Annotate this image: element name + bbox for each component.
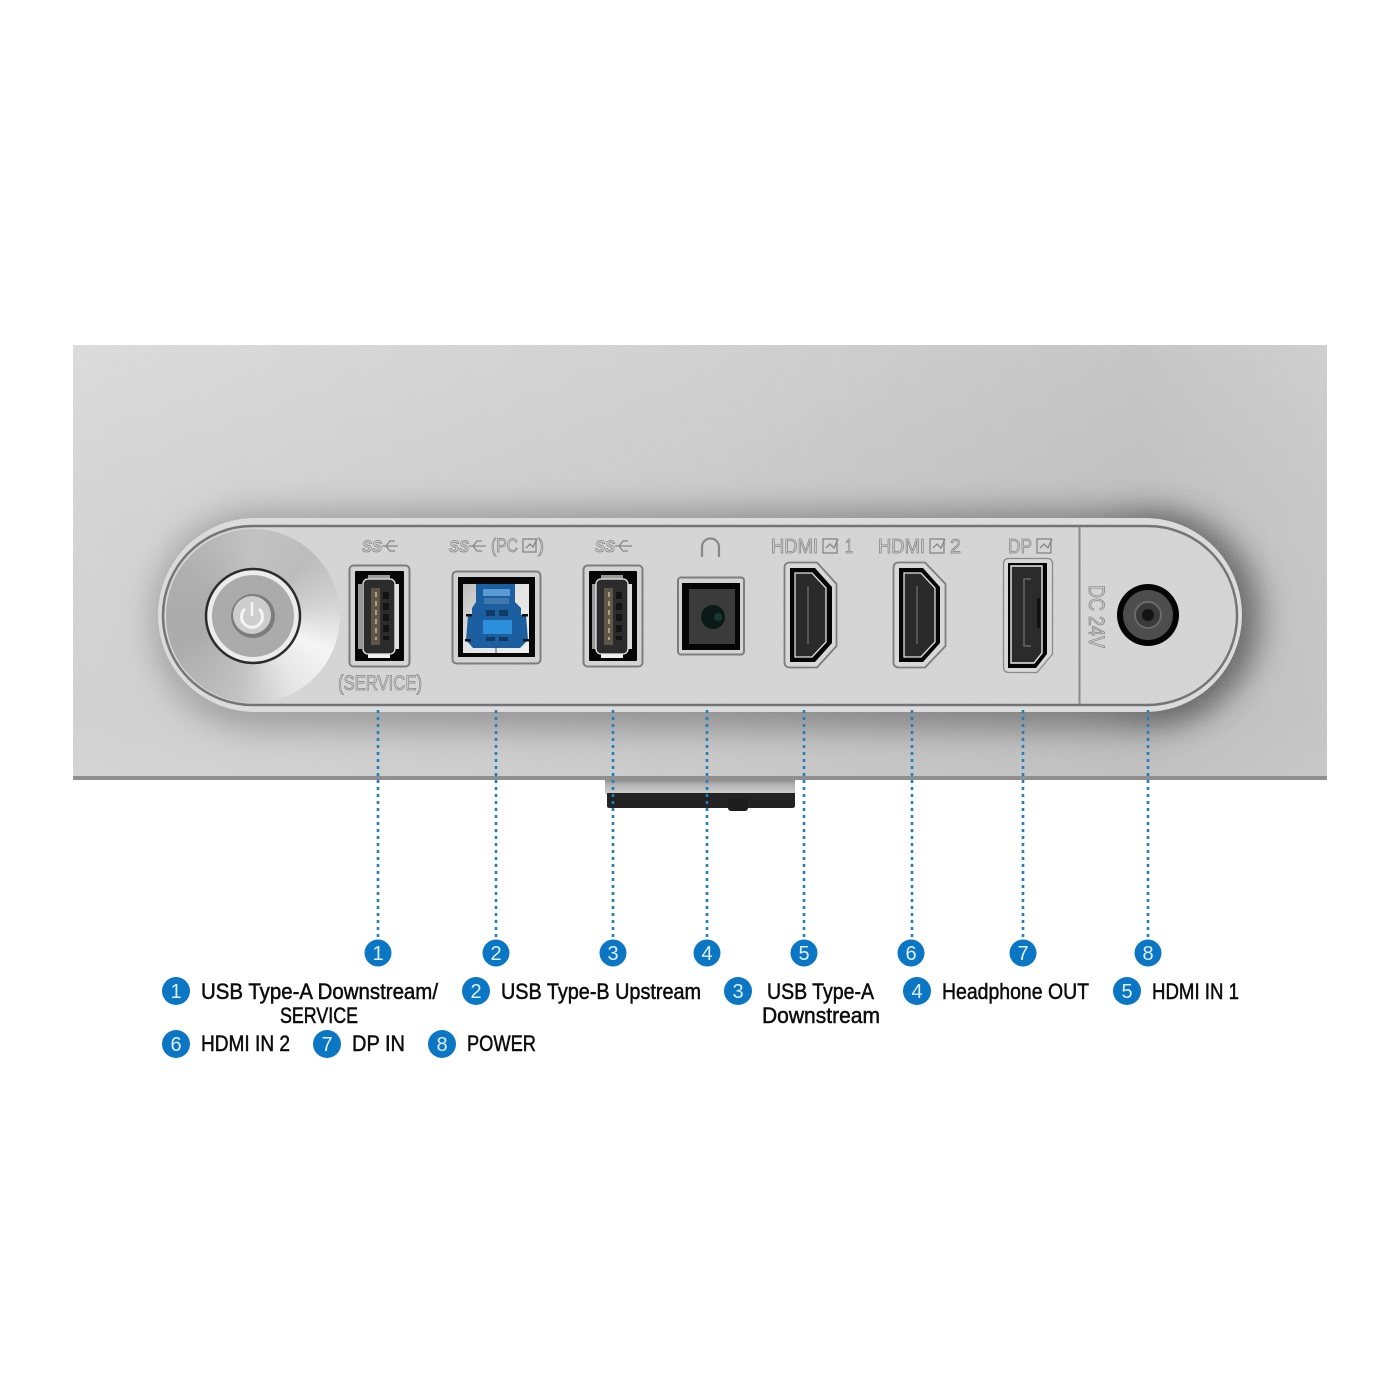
port label: DP: DP (1008, 536, 1032, 558)
port label: SERVICE: (SERVICE) (338, 672, 422, 695)
legend item 5: HDMI IN 1 (1152, 979, 1239, 1004)
port: DisplayPort (1004, 558, 1052, 672)
legend item 4 (903, 977, 1089, 1005)
legend item 7 (313, 1030, 405, 1058)
legend item 1: SERVICE (280, 1003, 358, 1028)
marker 6: 6 (905, 943, 917, 965)
legend item 2 (462, 977, 701, 1005)
marker 8: 8 (1142, 943, 1154, 965)
legend item 6: 6 (170, 1034, 182, 1056)
panel: monitor back surface (73, 345, 1327, 780)
legend item 5: 5 (1121, 981, 1133, 1003)
legend item 6 (162, 1030, 290, 1058)
marker 4 (694, 940, 720, 966)
port: headphone jack (678, 578, 744, 654)
legend (162, 977, 1239, 1058)
port label: HDMI 2: 2 (950, 536, 961, 558)
legend item 3 (724, 977, 880, 1028)
port label: SS USB PC: SS (449, 537, 470, 556)
callout markers row (364, 940, 1162, 966)
port label: HDMI 2 (878, 536, 961, 558)
port: USB Type-B upstream (452, 572, 540, 664)
port label: SS USB 3: SS (595, 537, 616, 556)
marker 6 (898, 940, 924, 966)
legend item 8: POWER (467, 1031, 536, 1056)
marker 1 (364, 940, 392, 966)
port: DC power jack (1117, 584, 1179, 646)
port label: DP (1008, 536, 1052, 558)
port label: SS USB PC: ) (538, 536, 544, 557)
legend item 6: HDMI IN 2 (201, 1031, 290, 1056)
port label: HDMI 1: HDMI (771, 536, 818, 558)
legend item 3: USB Type-A (767, 979, 874, 1004)
legend item 5 (1113, 977, 1239, 1005)
legend item 2: 2 (470, 981, 482, 1003)
marker 8 (1134, 940, 1162, 966)
port label: SS USB 1 (362, 537, 398, 556)
dotted leader lines (378, 710, 1148, 940)
stand bracket (605, 780, 795, 811)
port label: HDMI 1 (771, 536, 853, 558)
icon: headphones (702, 538, 719, 557)
legend item 3: Downstream (762, 1003, 880, 1028)
marker 2: 2 (490, 943, 502, 965)
legend item 4: 4 (911, 981, 923, 1003)
marker 7: 7 (1017, 943, 1029, 965)
legend item 1 (162, 977, 439, 1028)
connector plate (158, 518, 1242, 712)
infographic: monitor rear port panel with legend (73, 345, 1327, 1058)
marker 3 (600, 940, 626, 966)
port label: SS USB 3 (595, 537, 632, 556)
power button disc (166, 529, 340, 703)
marker 4: 4 (701, 943, 713, 965)
legend item 8 (428, 1030, 536, 1058)
marker 2 (482, 940, 510, 966)
port: HDMI 2 (894, 562, 946, 668)
marker 5: 5 (798, 943, 810, 965)
port: USB Type-A service (350, 566, 410, 666)
marker 7 (1010, 940, 1036, 966)
marker 1: 1 (372, 943, 384, 965)
legend item 4: Headphone OUT (942, 979, 1089, 1004)
port label: SS USB 1: SS (362, 537, 383, 556)
port label: SS USB PC (449, 536, 544, 557)
legend item 7: DP IN (352, 1031, 405, 1056)
legend item 1: 1 (170, 981, 182, 1003)
legend item 8: 8 (436, 1034, 448, 1056)
port label: HDMI 1: 1 (845, 536, 853, 558)
port label: HDMI 2: HDMI (878, 536, 925, 558)
port label: DC 24V: DC 24V (1084, 585, 1109, 648)
legend item 3: 3 (732, 981, 744, 1003)
legend item 2: USB Type-B Upstream (501, 979, 701, 1004)
legend item 7: 7 (321, 1034, 333, 1056)
port: USB Type-A downstream (584, 566, 642, 666)
legend item 1: USB Type-A Downstream/ (201, 979, 439, 1004)
marker 5 (790, 940, 818, 966)
port: HDMI 1 (784, 562, 836, 668)
port label: SS USB PC: (PC (491, 536, 518, 557)
marker 3: 3 (607, 943, 619, 965)
